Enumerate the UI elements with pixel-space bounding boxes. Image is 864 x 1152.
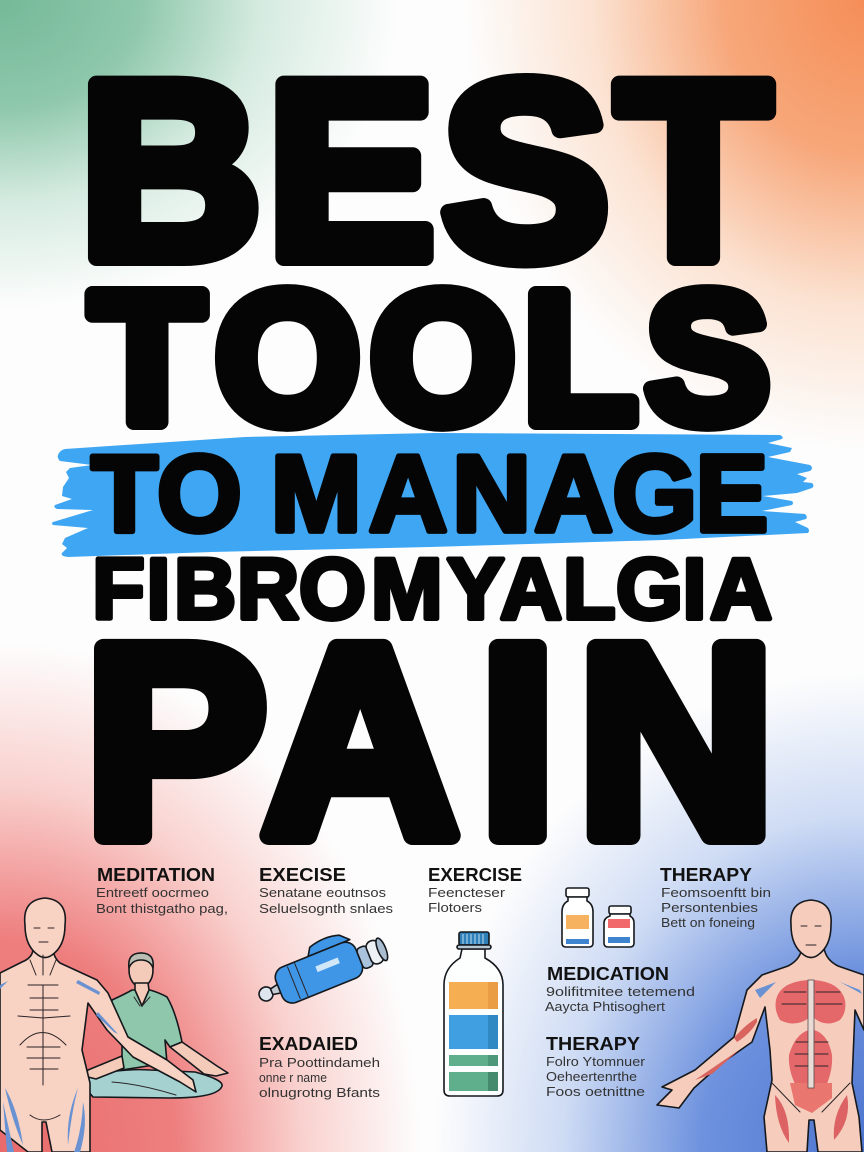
tool: therapy bottom: Oeheertenrthe <box>546 1069 637 1084</box>
title: PAIN: PAIN <box>85 590 774 894</box>
icon: inhaler <box>249 919 392 1014</box>
tool: execise <box>259 865 394 916</box>
tool: exadaied: onne r name <box>259 1070 327 1085</box>
tool: therapy top: Persontenbies <box>661 900 759 915</box>
tool: medication: MEDICATION <box>547 964 669 984</box>
tool: meditation <box>96 865 228 916</box>
tool: exercise <box>428 865 522 915</box>
brush stroke highlight <box>52 433 814 557</box>
tool: meditation: MEDITATION <box>97 865 215 885</box>
tool: exadaied <box>259 1034 381 1100</box>
tool: exadaied: EXADAIED <box>259 1034 358 1054</box>
title: BEST: BEST <box>80 30 770 312</box>
tool: execise: Seluelsognth snlaes <box>259 901 394 916</box>
tool: therapy bottom: Folro Ytomnuer <box>546 1054 646 1069</box>
tool: exadaied: Pra Poottindameh <box>259 1055 380 1070</box>
tool: exercise: Feencteser <box>428 885 506 900</box>
tool: therapy top: Feomsoenftt bin <box>661 885 771 900</box>
tool: execise: Senatane eoutnsos <box>259 885 387 900</box>
icon: large bottle <box>444 932 503 1096</box>
tool: therapy bottom: Foos oetnittne <box>546 1084 645 1099</box>
tool: meditation: Bont thistgatho pag, <box>96 901 228 916</box>
subtitle: FIBROMYALGIA: FIBROMYALGIA <box>92 542 772 638</box>
tool: therapy top: Bett on foneing <box>661 915 755 930</box>
title: TOOLS: TOOLS <box>90 255 770 462</box>
icon: left body figure <box>0 898 196 1152</box>
tool: execise: EXECISE <box>259 865 346 885</box>
icon: right anatomical figure <box>657 900 864 1152</box>
tool: therapy bottom: THERAPY <box>546 1034 640 1054</box>
tool: medication: Aaycta Phtisoghert <box>545 999 665 1014</box>
icon: small bottle 2 <box>604 906 634 947</box>
tool: medication <box>545 964 695 1014</box>
tool: medication: 9olifitmitee tetemend <box>546 984 695 999</box>
tool: meditation: Entreetf oocrmeo <box>96 885 209 900</box>
icon: seated meditating person <box>84 953 228 1098</box>
tool: therapy top: THERAPY <box>660 865 752 885</box>
tool: exercise: Flotoers <box>428 900 483 915</box>
subtitle: TO MANAGE: TO MANAGE <box>91 433 768 555</box>
tool: exadaied: olnugrotng Bfants <box>259 1085 381 1100</box>
tool: exercise: EXERCISE <box>428 865 522 885</box>
tool: therapy top <box>660 865 771 930</box>
tool: therapy bottom <box>546 1034 646 1099</box>
icon: small bottle 1 <box>562 888 593 947</box>
